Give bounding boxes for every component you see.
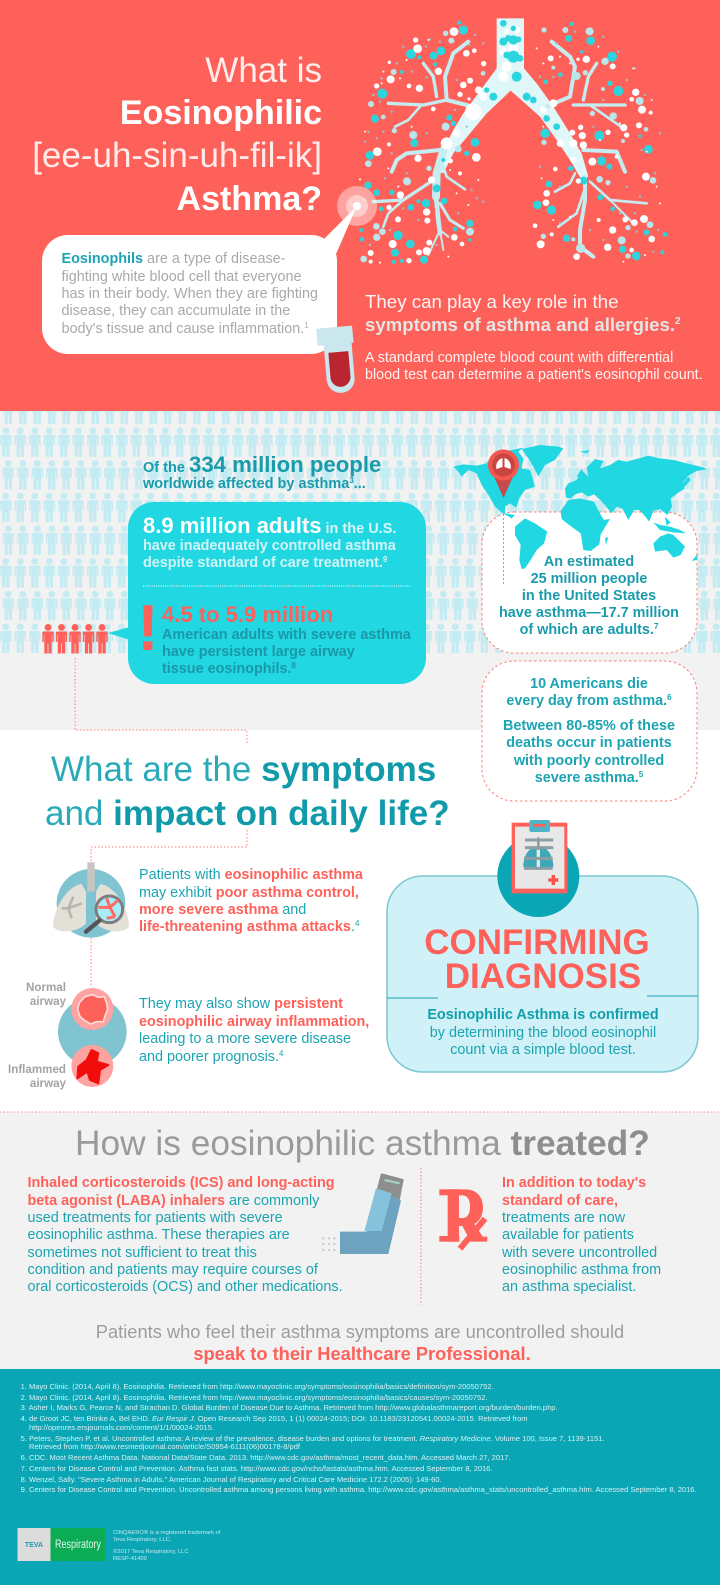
text: speak to healthcare professional: speak to their Healthcare Professional. bbox=[193, 1343, 531, 1364]
text: patients may exhibit: life-threatening asthma attacks. bbox=[139, 919, 355, 935]
text: trademark notice: CINQAERO® is a registered trademark of bbox=[113, 1529, 221, 1536]
text: key role statement: 2 bbox=[675, 316, 681, 327]
references list: 4. de Groot JC, ten Brinke A, Bel EHD. Eur Respir J. Open Research Sep 2015, 1 (1) 00024-2015; DOI: 10.1183/23120541.00024-2015. Retrieved from bbox=[21, 1414, 528, 1423]
text: speak to healthcare professional: Patients who feel their asthma symptoms are uncontrolled should bbox=[96, 1321, 624, 1342]
text: US asthma statistic: in the United States bbox=[522, 588, 656, 604]
panel: cyan statistics box: ! bbox=[137, 591, 159, 664]
panel: treatment section background bbox=[0, 1112, 720, 1369]
connector: dotted line from people to symptoms bbox=[75, 658, 247, 987]
panel: confirming diagnosis: by determining the blood eosinophil bbox=[430, 1025, 656, 1041]
label: inflamed airway: airway bbox=[30, 1077, 67, 1090]
references list: 2. Mayo Clinic. (2014, April 8). Eosinophilia. Retrieved from http://www.mayoclinic.org/symptoms/eosinophilia/basics/causes/sym-20050752. bbox=[21, 1393, 488, 1402]
callout: eosinophils definition bubble: body's tissue and cause inflammation. bbox=[62, 321, 309, 337]
text: persistent airway inflammation: and poorer prognosis. bbox=[139, 1049, 284, 1065]
text: trademark notice: Teva Respiratory, LLC. bbox=[113, 1537, 172, 1543]
divider bbox=[420, 1168, 422, 1305]
text: 334 million people heading: Of the bbox=[143, 460, 189, 476]
text: persistent airway inflammation: leading to a more severe disease bbox=[139, 1031, 351, 1047]
panel: cyan statistics box bbox=[108, 502, 426, 684]
text: 334 million people heading: worldwide affected by asthma bbox=[143, 476, 349, 492]
text: speak to healthcare professional bbox=[96, 1321, 624, 1364]
illustration: world map bbox=[453, 445, 707, 569]
text: inhaled corticosteroids: oral corticosteroids (OCS) and other medications. bbox=[28, 1279, 343, 1295]
text: inhaled corticosteroids: used treatments for patients with severe bbox=[28, 1210, 283, 1226]
illustration: lungs bbox=[359, 18, 667, 264]
text: patients may exhibit: Patients with eosinophilic asthma bbox=[139, 867, 363, 883]
icon: inhaler bbox=[322, 1174, 403, 1254]
text: key role statement: A standard complete blood count with differential bbox=[365, 350, 673, 366]
panel: references footer background bbox=[0, 1369, 720, 1585]
panel: American deaths dotted box: 5 bbox=[639, 770, 644, 779]
text: 334 million people heading: ... bbox=[354, 476, 366, 492]
text: key role statement: symptoms of asthma and allergies. bbox=[365, 314, 675, 335]
text: today's standard of care: In addition to today's bbox=[502, 1175, 646, 1191]
panel: confirming diagnosis: Eosinophilic Asthma is confirmed bbox=[427, 1007, 659, 1023]
text: inhaled corticosteroids: eosinophilic asthma. These therapies are bbox=[28, 1227, 290, 1243]
label: normal airway: airway bbox=[30, 995, 67, 1008]
panel: confirming diagnosis bbox=[387, 876, 698, 1072]
text: inhaled corticosteroids: sometimes not sufficient to treat this bbox=[28, 1245, 257, 1261]
references list bbox=[21, 1382, 697, 1494]
text: today's standard of care: with severe uncontrolled bbox=[501, 1245, 657, 1261]
text: key role statement: blood test can determine a patient's eosinophil count. bbox=[365, 367, 703, 383]
panel: cyan statistics box: have persistent large airway bbox=[162, 644, 355, 660]
text: trademark notice bbox=[113, 1529, 221, 1562]
logo: Teva Respiratory: TEVA bbox=[25, 1542, 43, 1549]
references list: 7. Centers for Disease Control and Prevention. Asthma fast stats. http://www.cdc.gov/nchs/fastats/asthma.htm. Accessed September 8, 2016. bbox=[21, 1464, 493, 1473]
icon: map pin with lungs bbox=[488, 450, 519, 584]
logo: Teva Respiratory: Respiratory bbox=[55, 1539, 101, 1551]
title: [ee-uh-sin-uh-fil-ik] bbox=[32, 136, 322, 175]
label: normal airway: Normal bbox=[26, 981, 66, 994]
text: today's standard of care: available for patients bbox=[502, 1227, 634, 1243]
text: patients may exhibit: more severe asthma and bbox=[139, 902, 306, 918]
text: today's standard of care: an asthma specialist. bbox=[502, 1279, 636, 1295]
icon: normal and inflamed airway bbox=[58, 988, 127, 1087]
logo: Teva Respiratory bbox=[18, 1528, 106, 1561]
text: today's standard of care: eosinophilic asthma from bbox=[502, 1262, 661, 1278]
panel: people pattern section background bbox=[0, 411, 720, 730]
panel: American deaths dotted box: with poorly controlled bbox=[513, 753, 664, 769]
panel: cyan statistics box: despite standard of care treatment. bbox=[143, 555, 383, 571]
references list: http://openres.ersjournals.com/content/1/1/00024-2015. bbox=[29, 1423, 214, 1432]
panel: confirming diagnosis: CONFIRMING bbox=[424, 923, 650, 962]
text: US asthma statistic: of which are adults. bbox=[520, 622, 654, 638]
heading: symptoms and impact bbox=[45, 750, 450, 833]
text: US asthma statistic: 7 bbox=[654, 622, 659, 631]
callout: eosinophils definition bubble: Eosinophils are a type of disease- bbox=[62, 251, 285, 267]
callout: eosinophils definition bubble: 1 bbox=[304, 321, 309, 330]
text: today's standard of care: treatments are now bbox=[502, 1210, 626, 1226]
references list: 3. Asher I, Marks G, Pearce N, and Strachan D. Global Burden of Disease Due to Asthma. Retrieved from http://www.globalasthmareport.org/burden/burden.php. bbox=[21, 1403, 558, 1412]
text: patients may exhibit: may exhibit poor asthma control, bbox=[139, 885, 359, 901]
label: inflamed airway: Inflammed bbox=[8, 1063, 66, 1076]
callout: eosinophils definition bubble: fighting white blood cell that everyone bbox=[62, 269, 302, 285]
panel: confirming diagnosis: count via a simple blood test. bbox=[450, 1042, 636, 1058]
text: US asthma statistic: An estimated bbox=[544, 554, 634, 570]
panel: coral intro background bbox=[0, 0, 720, 411]
text: US asthma statistic: have asthma—17.7 million bbox=[499, 605, 679, 621]
text: inhaled corticosteroids: beta agonist (LABA) inhalers are commonly bbox=[28, 1193, 319, 1209]
icon: magnified eosinophil marker bbox=[337, 186, 377, 226]
label: inflamed airway bbox=[8, 1063, 67, 1090]
panel: American deaths dotted box: severe asthma. bbox=[535, 770, 639, 786]
text: US asthma statistic: 25 million people bbox=[531, 571, 647, 587]
panel: cyan statistics box: tissue eosinophils. bbox=[162, 661, 292, 677]
icon: Rx prescription symbol bbox=[439, 1189, 487, 1249]
heading: symptoms and impact: What are the symptoms bbox=[51, 750, 436, 789]
text: trademark notice: ©2017 Teva Respiratory, LLC bbox=[113, 1548, 189, 1555]
callout: eosinophils definition bubble bbox=[42, 206, 357, 354]
references list: 9. Centers for Disease Control and Prevention. Uncontrolled asthma among persons living with asthma. http://www.cdc.gov/asthma/asthma_stats/uncontrolled_asthma.htm. Accessed September 8, 2016. bbox=[21, 1485, 697, 1494]
panel: cyan statistics box: have inadequately controlled asthma bbox=[143, 538, 397, 554]
text: persistent airway inflammation: eosinophilic airway inflammation, bbox=[139, 1014, 369, 1030]
heading: how is eosinophilic asthma treated: How is eosinophilic asthma treated? bbox=[75, 1124, 650, 1163]
text: persistent airway inflammation: They may also show persistent bbox=[139, 996, 343, 1012]
references list: 5. Peters, Stephen P. et al. Uncontrolled asthma: A review of the prevalence, disease burden and options for treatment. Respiratory Medicine. Volume 100, Issue 7, 1139-1151. bbox=[21, 1434, 605, 1443]
title bbox=[32, 51, 322, 218]
references list: 6. CDC. Most Recent Asthma Data. National Data/State Data. 2013. http://www.cdc.gov/asthma/most_recent_data.htm. Accessed March 27, 2017. bbox=[21, 1453, 511, 1462]
text: key role statement bbox=[365, 291, 703, 383]
panel: American deaths dotted box: every day from asthma. bbox=[506, 693, 667, 709]
references list: 1. Mayo Clinic. (2014, April 8). Eosinophilia. Retrieved from http://www.mayoclinic.org/symptoms/eosinophilia/basics/definition/sym-20050752. bbox=[21, 1382, 494, 1391]
title: Eosinophilic bbox=[120, 94, 322, 132]
icon: row of red people bbox=[42, 624, 108, 654]
text: trademark notice: RESP-41409 bbox=[113, 1556, 147, 1562]
text: 334 million people heading: 3 bbox=[349, 476, 354, 485]
panel: cyan statistics box: 4.5 to 5.9 million bbox=[162, 602, 333, 627]
references list: 8. Wenzel, Sally. "Severe Asthma in Adults." American Journal of Respiratory and Critical Care Medicine 172.2 (2005): 149-60. bbox=[21, 1475, 442, 1484]
text: key role statement: They can play a key role in the bbox=[365, 291, 618, 312]
icon: blood test tube bbox=[316, 326, 358, 395]
callout: eosinophils definition bubble: disease, they can accumulate in the bbox=[62, 303, 290, 319]
panel: confirming diagnosis: DIAGNOSIS bbox=[445, 957, 641, 996]
panel: American deaths dotted box: 10 Americans die bbox=[530, 676, 648, 692]
panel: American deaths dotted box bbox=[482, 661, 697, 801]
panel: American deaths dotted box: 6 bbox=[667, 693, 672, 702]
text: inhaled corticosteroids: condition and patients may require courses of bbox=[28, 1262, 319, 1278]
text: inhaled corticosteroids: Inhaled corticosteroids (ICS) and long-acting bbox=[28, 1175, 335, 1191]
title: Asthma? bbox=[177, 180, 322, 218]
icon: clipboard with x-ray bbox=[497, 820, 579, 917]
panel: American deaths dotted box: Between 80-85% of these bbox=[503, 718, 675, 734]
panel: cyan statistics box: 9 bbox=[383, 555, 388, 564]
icon: lungs with magnifying glass bbox=[53, 862, 129, 938]
title: What is bbox=[205, 51, 322, 90]
callout: eosinophils definition bubble: has in their body. When they are fighting bbox=[62, 286, 318, 302]
text: today's standard of care: standard of care, bbox=[502, 1193, 618, 1209]
text: 334 million people heading: 334 million people bbox=[189, 452, 381, 477]
text: persistent airway inflammation: 4 bbox=[279, 1049, 284, 1058]
heading: symptoms and impact: and impact on daily life? bbox=[45, 794, 450, 833]
panel: US asthma dotted box bbox=[482, 512, 697, 653]
references list: Retrieved from http://www.resmedjournal.com/article/S0954-6111(06)00178-8/pdf bbox=[29, 1442, 301, 1451]
panel: cyan statistics box: American adults with severe asthma bbox=[162, 627, 412, 643]
text: patients may exhibit: 4 bbox=[355, 919, 360, 928]
panel: American deaths dotted box: deaths occur in patients bbox=[506, 735, 672, 751]
text: US asthma statistic bbox=[499, 554, 679, 638]
panel: cyan statistics box: 8 bbox=[292, 661, 297, 670]
label: normal airway bbox=[26, 981, 67, 1008]
panel: cyan statistics box: 8.9 million adults in the U.S. bbox=[143, 513, 396, 538]
text: 334 million people heading bbox=[142, 452, 381, 492]
